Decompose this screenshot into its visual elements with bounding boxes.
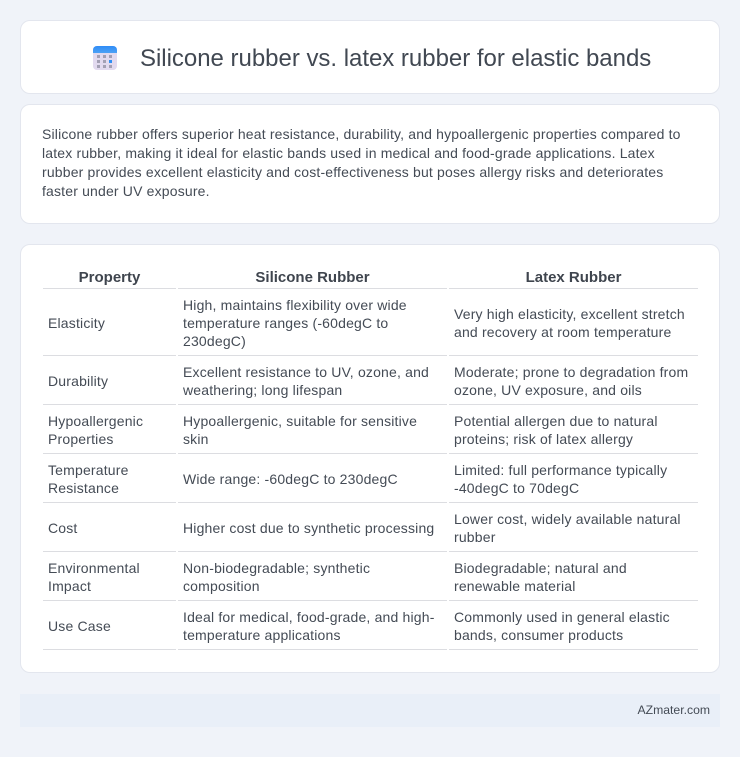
summary text: Silicone rubber offers superior heat resistance, durability, and hypoallergenic properties compared to [42, 126, 681, 142]
row: durability: Excellent resistance to UV, ozone, and [183, 364, 429, 380]
row: durability: weathering; long lifespan [183, 382, 342, 398]
row: elasticity: temperature ranges (-60degC to [183, 315, 388, 331]
row: elasticity: High, maintains flexibility over wide [183, 297, 407, 313]
summary text: latex rubber, making it ideal for elastic bands used in medical and food-grade applications. Latex [42, 145, 655, 161]
row: temperature: Wide range: -60degC to 230degC [183, 471, 398, 487]
row: durability: ozone, UV exposure, and oils [454, 382, 642, 398]
row: temperature: -40degC to 70degC [454, 480, 579, 496]
row: cost: Lower cost, widely available natural [454, 511, 681, 527]
row: environmental: Biodegradable; natural and [454, 560, 627, 576]
icon: calendar [93, 46, 117, 70]
column headers [79, 269, 622, 286]
row lines [43, 288, 698, 650]
row: use case: temperature applications [183, 627, 341, 643]
row: use case [48, 609, 670, 643]
column headers: Silicone Rubber [255, 269, 370, 286]
row: temperature: Limited: full performance typically [454, 462, 667, 478]
summary card [20, 104, 720, 224]
row: environmental: renewable material [454, 578, 576, 594]
row: environmental: Non-biodegradable; synthetic [183, 560, 370, 576]
row: environmental: composition [183, 578, 260, 594]
title card [20, 20, 720, 94]
row: temperature: Temperature [48, 462, 129, 478]
row: durability: Moderate; prone to degradation from [454, 364, 688, 380]
row: elasticity: Very high elasticity, excellent stretch [454, 306, 685, 322]
column headers: Property [79, 269, 140, 286]
row: environmental [48, 560, 627, 594]
row: elasticity: and recovery at room temperature [454, 324, 671, 340]
row: hypoallergenic: Potential allergen due to natural [454, 413, 658, 429]
row: hypoallergenic: proteins; risk of latex allergy [454, 431, 633, 447]
row: hypoallergenic: Properties [48, 431, 114, 447]
summary text: rubber provides excellent elasticity and cost-effectiveness but poses allergy risks and deteriorates [42, 164, 663, 180]
row: cost: rubber [454, 529, 496, 545]
row: hypoallergenic: Hypoallergenic [48, 413, 143, 429]
row: hypoallergenic: Hypoallergenic, suitable for sensitive [183, 413, 417, 429]
row: cost: Higher cost due to synthetic processing [183, 520, 434, 536]
summary text: faster under UV exposure. [42, 183, 210, 199]
row: temperature [48, 462, 668, 496]
summary text [42, 126, 681, 199]
row: elasticity [48, 297, 685, 349]
row: environmental: Impact [48, 578, 91, 594]
row: use case: Use Case [48, 618, 111, 634]
row: hypoallergenic [48, 413, 658, 447]
comparison table card [20, 244, 720, 673]
row: hypoallergenic: skin [183, 431, 209, 447]
row: use case: Commonly used in general elastic [454, 609, 670, 625]
row: elasticity: 230degC) [183, 333, 246, 349]
row: cost [48, 511, 681, 545]
title: Silicone rubber vs. latex rubber for elastic bands [140, 45, 651, 72]
footer credit: AZmater.com [638, 703, 710, 717]
row: environmental: Environmental [48, 560, 140, 576]
column headers: Latex Rubber [526, 269, 621, 286]
row: cost: Cost [48, 520, 78, 536]
row: use case: bands, consumer products [454, 627, 623, 643]
row: durability [48, 364, 688, 398]
row: elasticity: Elasticity [48, 315, 105, 331]
row: durability: Durability [48, 373, 108, 389]
footer bar [20, 694, 720, 727]
row: use case: Ideal for medical, food-grade, and high- [183, 609, 435, 625]
row: temperature: Resistance [48, 480, 119, 496]
